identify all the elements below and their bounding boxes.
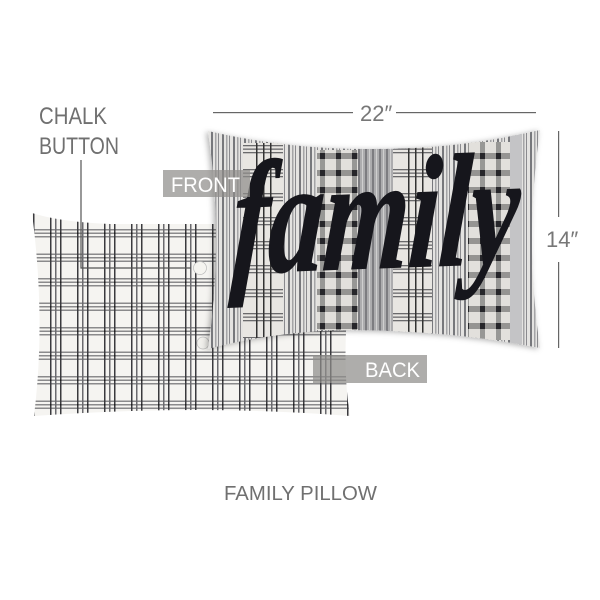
callout line: chalk button (81, 160, 191, 268)
label: chalk button (39, 103, 119, 160)
front pillow (208, 119, 540, 350)
height dimension: 14 inches: 14″ (546, 227, 578, 252)
icon: lower chalk button (197, 337, 209, 349)
caption: FAMILY PILLOW (224, 483, 377, 505)
pillow lettering: family: family (228, 119, 526, 308)
icon: upper chalk button (194, 262, 206, 274)
label: BACK (313, 355, 427, 383)
width dimension: 22 inches: 22″ (360, 101, 392, 126)
label: chalk button: CHALK (39, 103, 107, 130)
back pillow (32, 213, 350, 416)
label: chalk button: BUTTON (39, 133, 119, 160)
label: BACK: BACK (365, 359, 420, 382)
label: FRONT: FRONT (171, 174, 240, 197)
